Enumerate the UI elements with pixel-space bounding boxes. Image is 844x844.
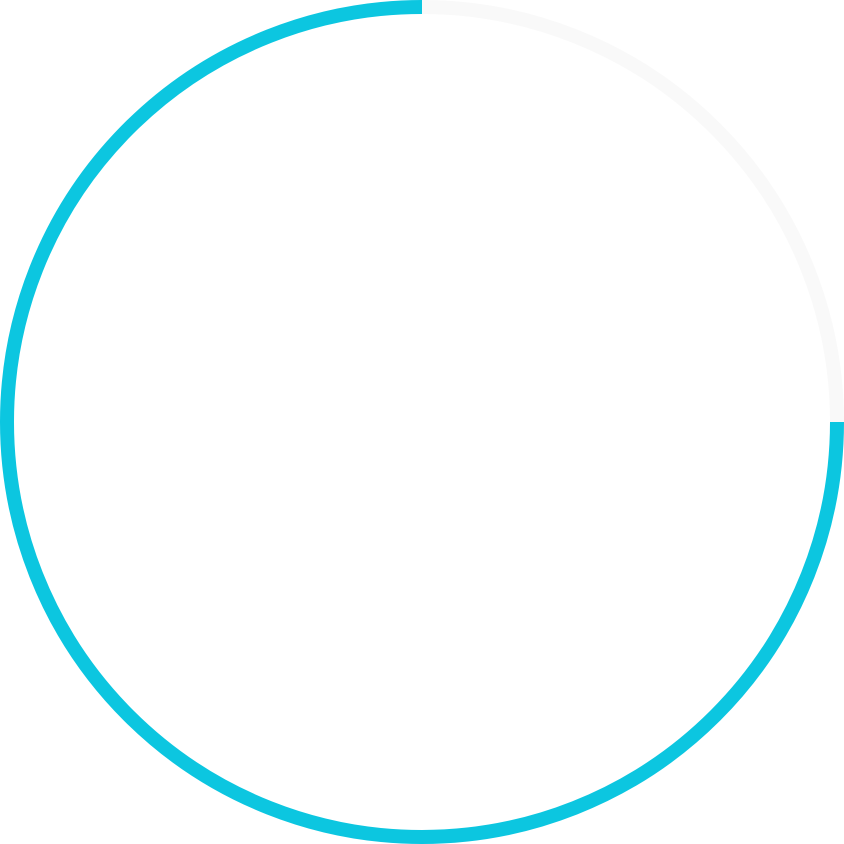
- ring track: remaining 25%: [422, 7, 837, 422]
